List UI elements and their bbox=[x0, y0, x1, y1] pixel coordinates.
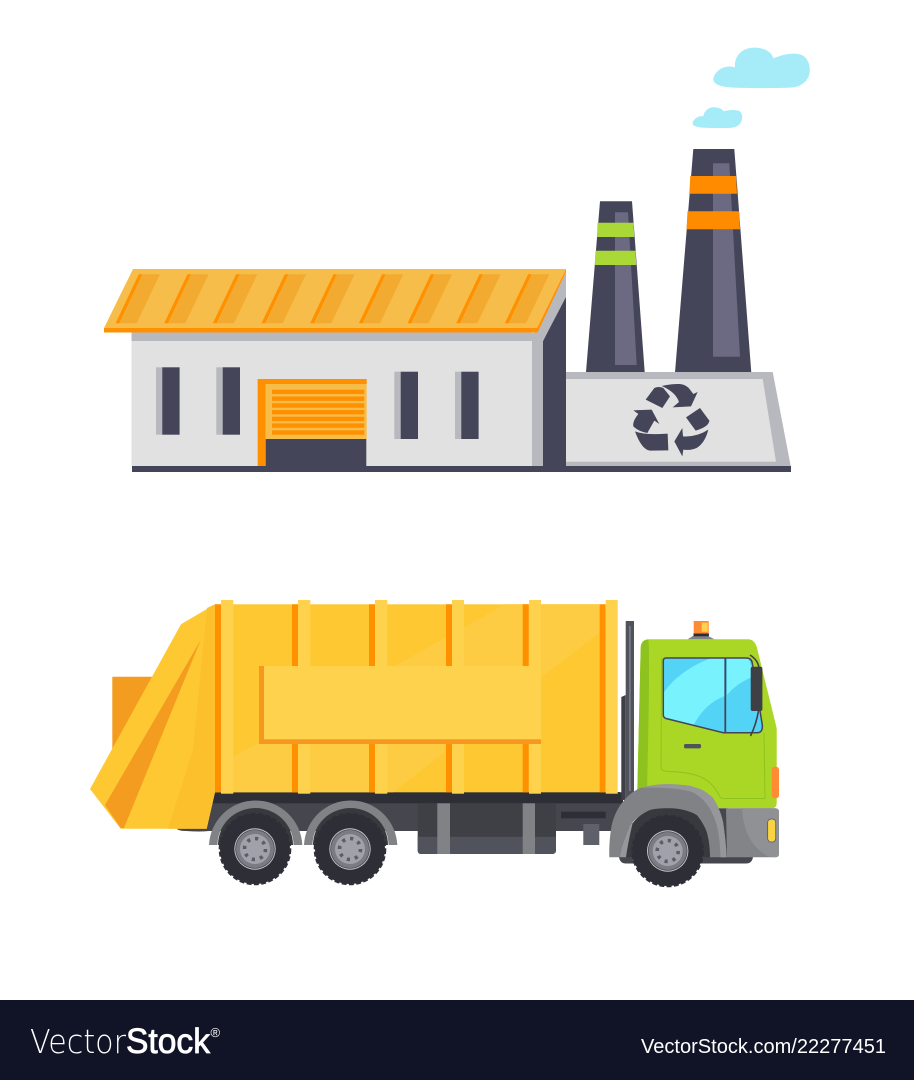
roof bbox=[104, 269, 566, 332]
side marker bbox=[772, 767, 779, 798]
front fender bbox=[609, 784, 727, 857]
mirror bbox=[750, 655, 762, 736]
under bumper bbox=[619, 857, 753, 864]
rear wheel arch 2 bbox=[304, 800, 397, 845]
logo wordmark: ® bbox=[210, 1025, 220, 1040]
logo wordmark: Vector bbox=[30, 1022, 126, 1061]
roof shadow bbox=[132, 332, 532, 341]
rear wheel well 1 bbox=[218, 808, 293, 845]
rear box bbox=[112, 677, 152, 760]
rear compactor bbox=[90, 604, 215, 829]
door handle bbox=[684, 744, 701, 748]
ground strip bbox=[132, 466, 791, 472]
image id: VectorStock.com/22277451 bbox=[641, 1036, 886, 1058]
container body bbox=[215, 600, 618, 794]
rear wheel 1 bbox=[220, 814, 290, 884]
building front wall bbox=[132, 341, 532, 466]
rear wheel well 2 bbox=[313, 808, 388, 845]
rear wheel 2 bbox=[314, 814, 386, 884]
door line bbox=[661, 658, 765, 798]
window 4 bbox=[455, 372, 479, 439]
beacon light bbox=[688, 621, 714, 639]
front wheel bbox=[632, 816, 703, 886]
window 3 bbox=[394, 372, 418, 439]
icon: recycling symbol bbox=[633, 384, 709, 456]
building side bbox=[532, 272, 566, 466]
rear wheel arch 1 bbox=[209, 800, 302, 845]
factory bbox=[104, 48, 810, 472]
cloud: small bbox=[693, 107, 742, 128]
fuel tank bbox=[418, 803, 556, 854]
chassis bbox=[176, 792, 630, 845]
logo wordmark bbox=[30, 1022, 220, 1061]
footer band bbox=[0, 1000, 914, 1080]
logo wordmark: Stock bbox=[126, 1022, 210, 1061]
chimney: tall with orange bands bbox=[675, 149, 751, 372]
exhaust pipe bbox=[621, 621, 634, 800]
window bbox=[663, 658, 762, 733]
cloud: large bbox=[713, 48, 810, 88]
recycling base bbox=[560, 372, 791, 466]
chimney: small with green bands bbox=[586, 201, 645, 372]
window 1 bbox=[156, 367, 180, 435]
window 2 bbox=[216, 367, 240, 435]
roller door bbox=[258, 379, 367, 469]
cab bbox=[637, 639, 779, 808]
front wheel well bbox=[620, 805, 714, 857]
side panel bbox=[259, 666, 541, 744]
bumper bbox=[718, 808, 779, 857]
garbage truck bbox=[90, 600, 779, 886]
